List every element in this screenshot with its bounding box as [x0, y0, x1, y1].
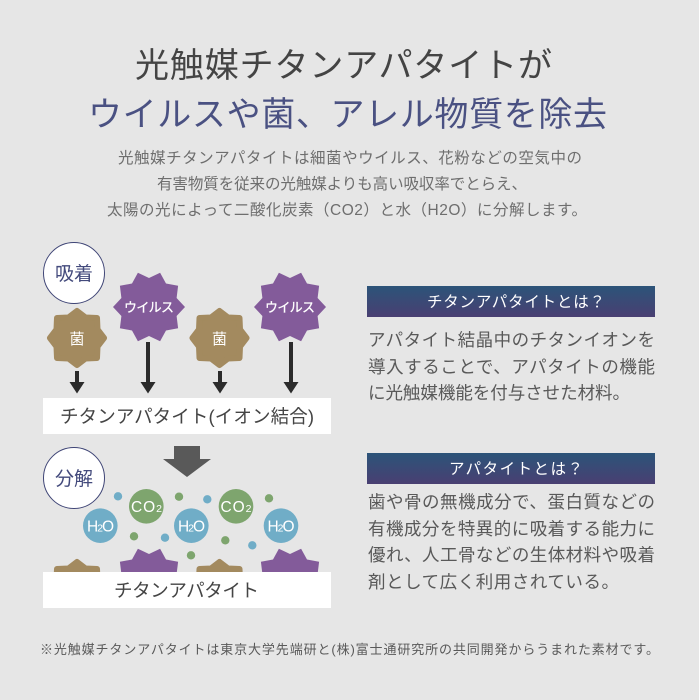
body text: 優れ、人工骨などの生体材料や吸着 — [368, 545, 655, 565]
icon: bacteria 1: 菌 — [69, 331, 85, 348]
molecules — [83, 489, 298, 560]
panel: decomposition diagram — [43, 448, 331, 617]
arrow: process down — [163, 446, 211, 477]
partial bacteria and viruses — [54, 548, 320, 572]
body text: 導入することで、アパタイトの機能 — [368, 357, 655, 377]
panel: what is apatite — [367, 453, 655, 592]
body text: 剤として広く利用されている。 — [368, 572, 619, 592]
molecules: H2O — [87, 518, 114, 536]
arrow 4 — [284, 342, 298, 394]
heading bar: アパタイトとは？ — [449, 460, 583, 478]
body text: に光触媒機能を付与させた材料。 — [368, 383, 630, 403]
arrow 2 — [140, 342, 156, 394]
molecules: H2O — [178, 518, 205, 536]
title — [88, 47, 607, 134]
heading bar: チタンアパタイトとは？ — [427, 293, 605, 311]
icon: bacteria 2 — [192, 311, 246, 365]
body text — [368, 330, 655, 403]
title: ウイルスや菌、アレル物質を除去 — [88, 96, 607, 134]
body text: 歯や骨の無機成分で、蛋白質などの — [368, 492, 655, 512]
panel: what is titanium apatite — [367, 286, 655, 403]
label bar: ion bonding — [43, 398, 331, 434]
body text: アパタイト結晶中のチタンイオンを — [368, 330, 655, 350]
icon: virus 1: ウイルス — [124, 300, 174, 315]
label bar: titanium apatite — [43, 572, 331, 608]
body text: 有機成分を特異的に吸着する能力に — [368, 519, 655, 539]
intro text — [107, 149, 587, 219]
arrow 1 — [70, 371, 84, 394]
badge: 吸着: 吸着 — [55, 263, 93, 285]
intro text: 太陽の光によって二酸化炭素（CO2）と水（H2O）に分解します。 — [107, 201, 587, 219]
icon: virus 2: ウイルス — [265, 300, 315, 315]
molecules: CO2 — [220, 499, 252, 516]
footnote: ※光触媒チタンアパタイトは東京大学先端研と(株)富士通研究所の共同開発からうまれた素材です。 — [40, 642, 659, 657]
panel: adsorption diagram — [43, 242, 331, 434]
icon: virus 1 — [113, 273, 185, 341]
molecules: CO2 — [131, 499, 162, 516]
label bar: ion bonding: チタンアパタイト(イオン結合) — [60, 406, 314, 427]
title: 光触媒チタンアパタイトが — [135, 47, 552, 85]
intro text: 光触媒チタンアパタイトは細菌やウイルス、花粉などの空気中の — [118, 149, 582, 167]
body text — [368, 492, 655, 592]
icon: bacteria 1 — [50, 311, 104, 365]
icon: bacteria 2: 菌 — [212, 331, 227, 348]
arrow 3 — [212, 371, 228, 394]
label bar: titanium apatite: チタンアパタイト — [114, 580, 259, 601]
badge: 分解: 分解 — [55, 468, 93, 490]
heading bar — [367, 453, 655, 484]
icon: virus 2 — [254, 273, 326, 341]
molecules: H2O — [268, 518, 294, 536]
badge: 吸着 — [44, 242, 104, 304]
intro text: 有害物質を従来の光触媒よりも高い吸収率でとらえ、 — [157, 175, 527, 193]
badge: 分解 — [44, 448, 104, 508]
heading bar — [367, 286, 655, 317]
